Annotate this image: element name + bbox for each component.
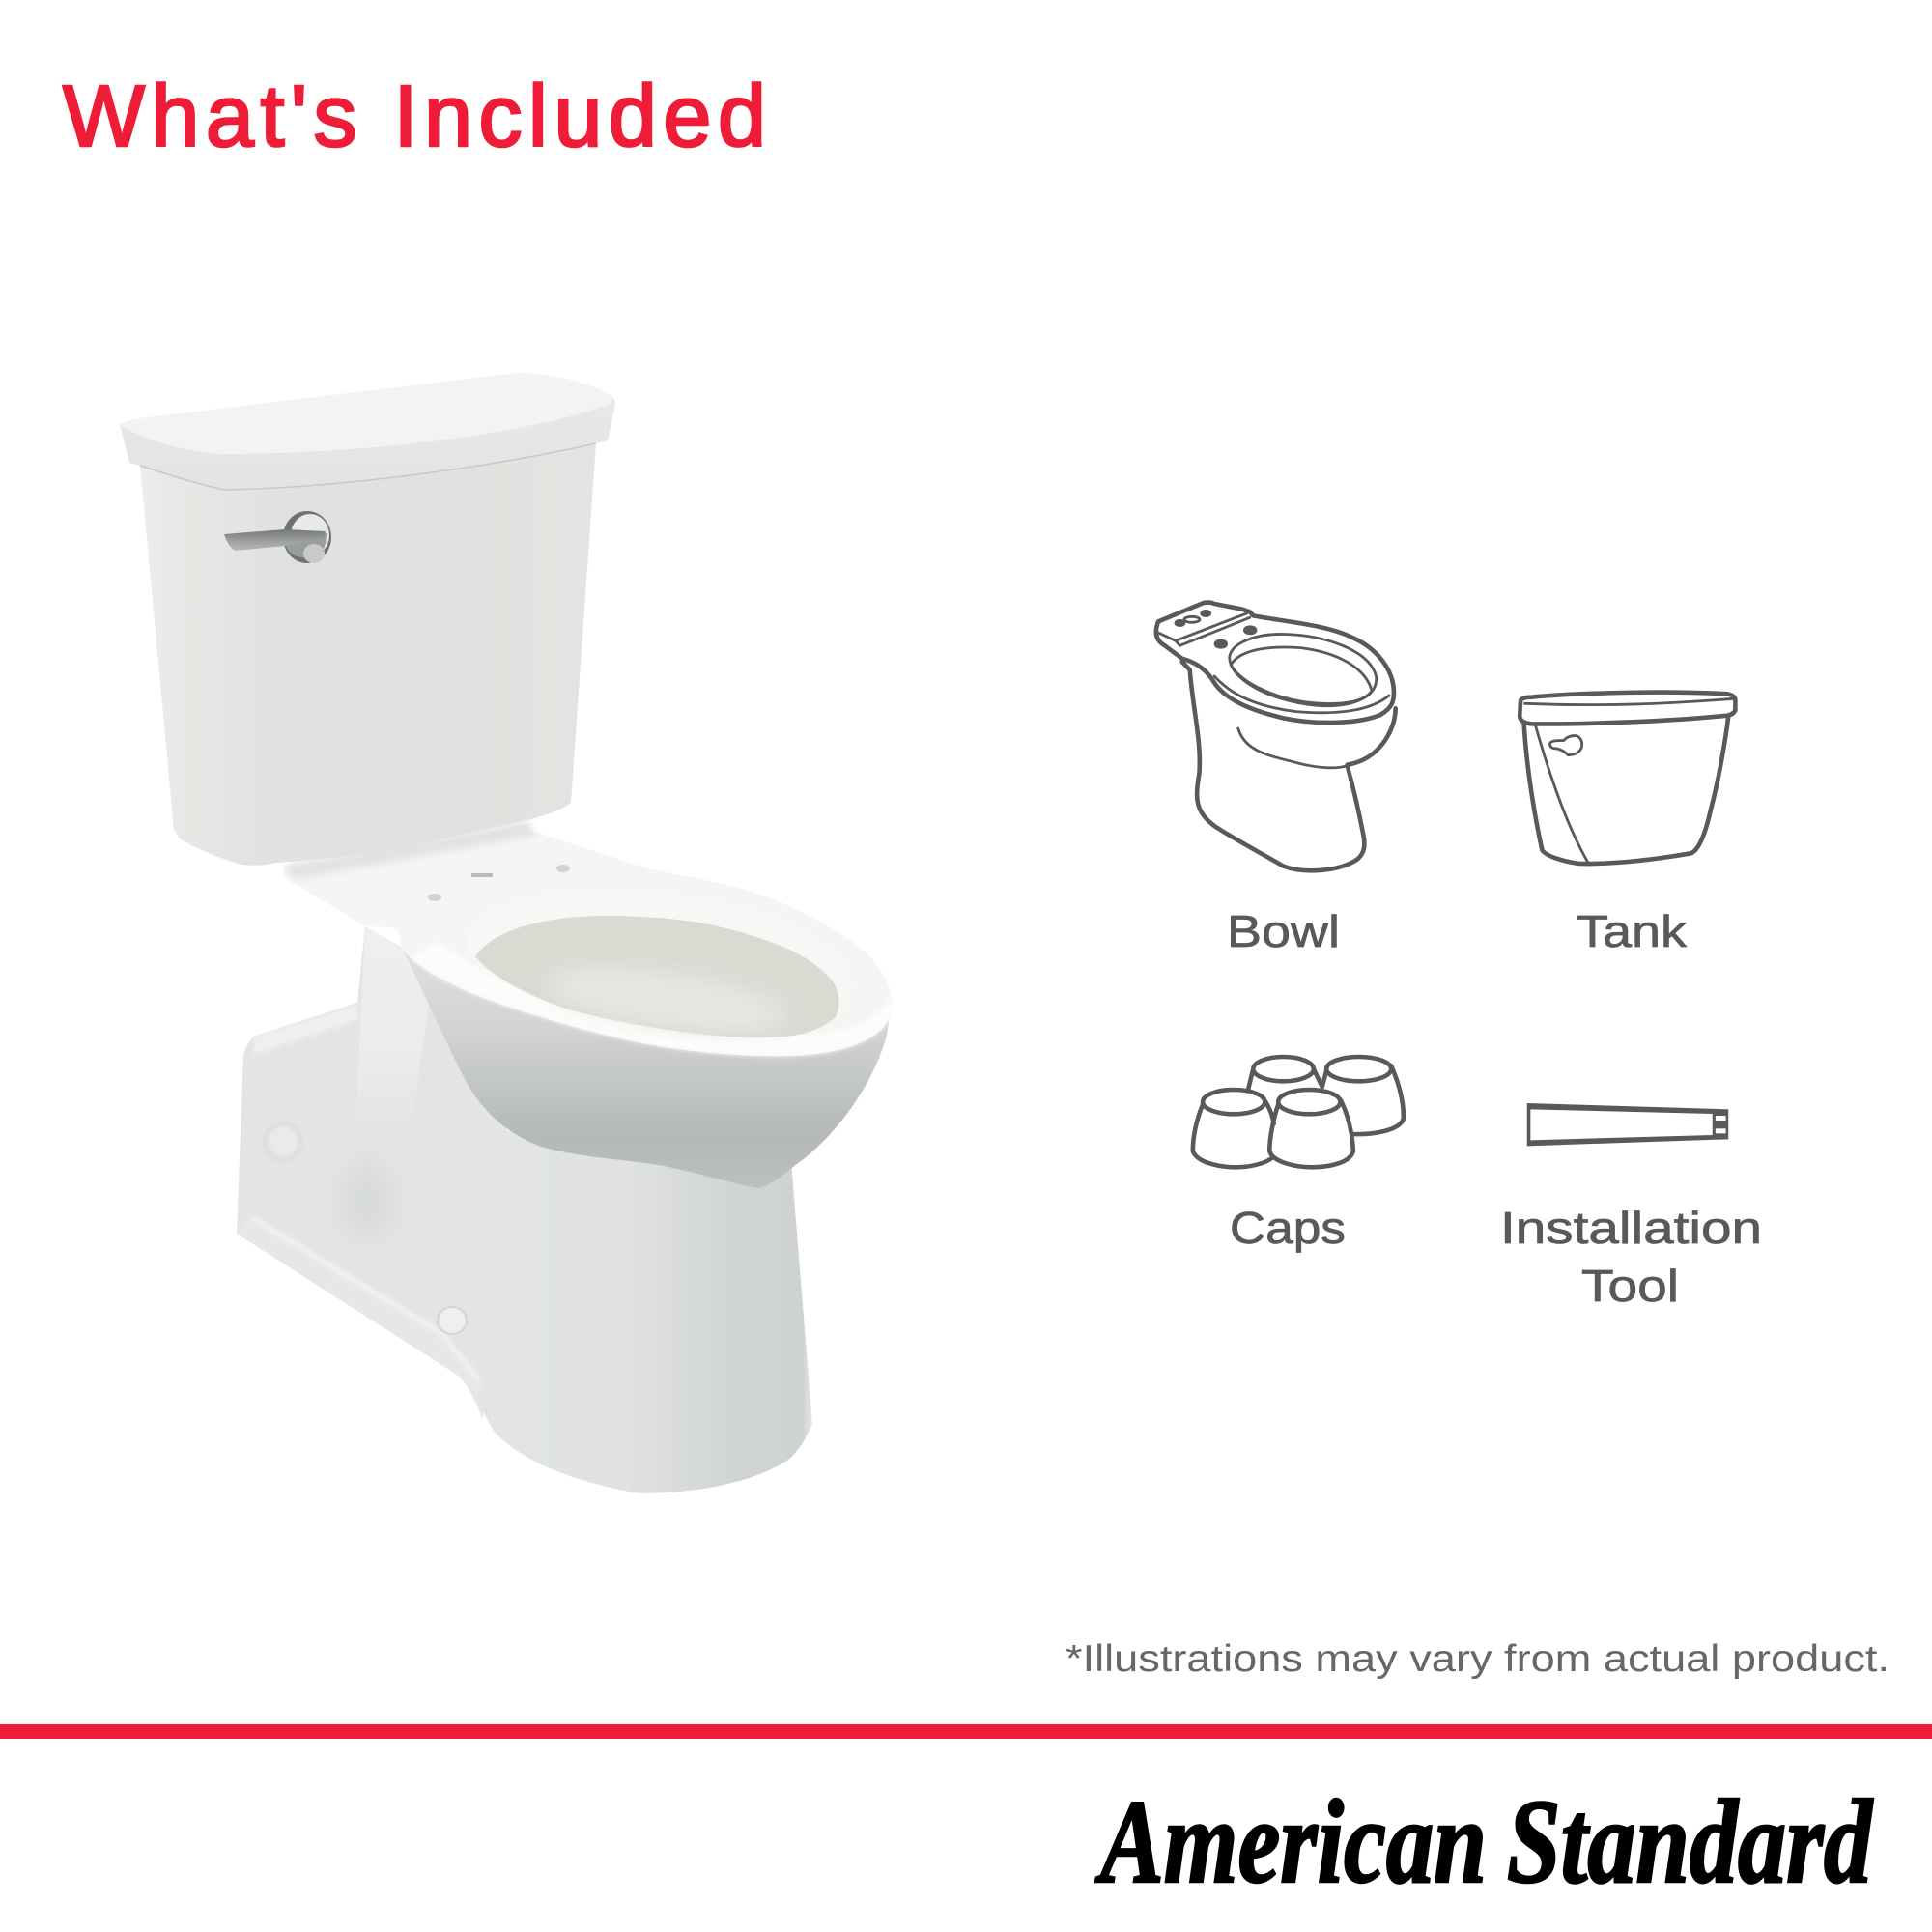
icon: tank (1520, 693, 1735, 864)
tank body (140, 443, 596, 866)
label: Installation Tool: Tool (1581, 1261, 1679, 1311)
label: Installation Tool (1500, 1203, 1762, 1311)
rim highlight (411, 942, 893, 1056)
flush lever (224, 511, 331, 563)
lid seam line (140, 443, 596, 490)
label: Caps: Caps (1230, 1203, 1346, 1253)
toilet rear flange (237, 926, 512, 1420)
label: Bowl: Bowl (1227, 906, 1340, 956)
icon: bowl (1156, 603, 1396, 870)
interior water highlight (544, 958, 789, 1041)
product photo: two-piece toilet (120, 373, 893, 1493)
footnote: *Illustrations may vary from actual product. (1065, 1638, 1889, 1680)
label: Installation Tool: Installation (1500, 1203, 1762, 1253)
raised deck under tank (284, 821, 536, 879)
deck mounting holes (428, 865, 570, 901)
label: Tank: Tank (1577, 906, 1688, 956)
toilet pedestal (478, 1130, 812, 1493)
American Standard logo (1094, 1776, 1874, 1908)
toilet bowl underside (403, 950, 889, 1188)
lid top surface (120, 373, 612, 454)
bowl interior (475, 916, 838, 1037)
icon: installation tool (1527, 1103, 1728, 1146)
tank lid (120, 373, 615, 490)
bowl opening (467, 891, 852, 1037)
icon: caps (1193, 1057, 1404, 1167)
red divider bar (0, 1724, 1932, 1739)
title: What's Included (63, 69, 766, 165)
American Standard logo: American (1094, 1776, 1487, 1908)
toilet deck and rim (284, 830, 893, 1056)
